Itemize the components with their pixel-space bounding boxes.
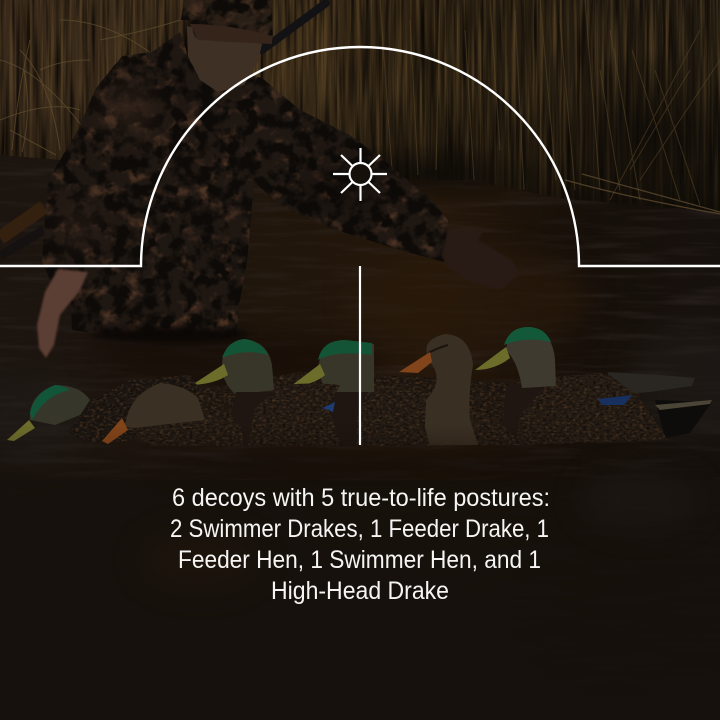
- duck decoys group: [7, 327, 712, 446]
- bottom dark fade: [0, 425, 720, 720]
- fallen reeds: [565, 174, 720, 214]
- tail: far right decoy: [608, 372, 712, 438]
- water tint patches: [140, 455, 700, 590]
- jacket highlights on the lit shoulder: [62, 86, 385, 249]
- shadow at waterline: [90, 327, 250, 343]
- caption line 3: Feeder Hen, 1 Swimmer Hen, and 1: [178, 546, 541, 574]
- background: water: [0, 150, 720, 720]
- shotgun stock: [0, 207, 44, 256]
- hunter: [0, 0, 520, 358]
- far right decoy: high-head drake: [475, 327, 668, 445]
- right hand: [442, 230, 520, 290]
- camouflage jacket: [42, 32, 448, 338]
- feeder drake head: [7, 385, 90, 441]
- bottom base: [0, 480, 720, 720]
- vertical divider line: [359, 266, 361, 445]
- rear body row: [195, 372, 640, 445]
- feeder hen: [102, 383, 245, 446]
- arc frame with horizon line: [0, 47, 720, 266]
- icon: sun: [333, 148, 387, 201]
- caption text: [170, 484, 550, 605]
- caption line 2: 2 Swimmer Drakes, 1 Feeder Drake, 1: [170, 515, 549, 543]
- background: reed bed: [0, 0, 720, 214]
- left hand: [37, 269, 88, 358]
- face: [187, 26, 262, 92]
- shotgun barrel: [262, 3, 326, 50]
- drake swimmer center: [291, 340, 430, 446]
- caption line 1: 6 decoys with 5 true-to-life postures:: [172, 484, 550, 512]
- reed stalks: right clump: [380, 0, 720, 205]
- drake swimmer left: [192, 339, 340, 446]
- caption line 4: High-Head Drake: [271, 577, 449, 605]
- cap: [181, 0, 273, 44]
- grass clump left: [0, 20, 180, 155]
- rear feathers of feeder drake: [68, 375, 200, 442]
- blue speculum: [598, 395, 632, 405]
- hen swimmer: [360, 334, 520, 446]
